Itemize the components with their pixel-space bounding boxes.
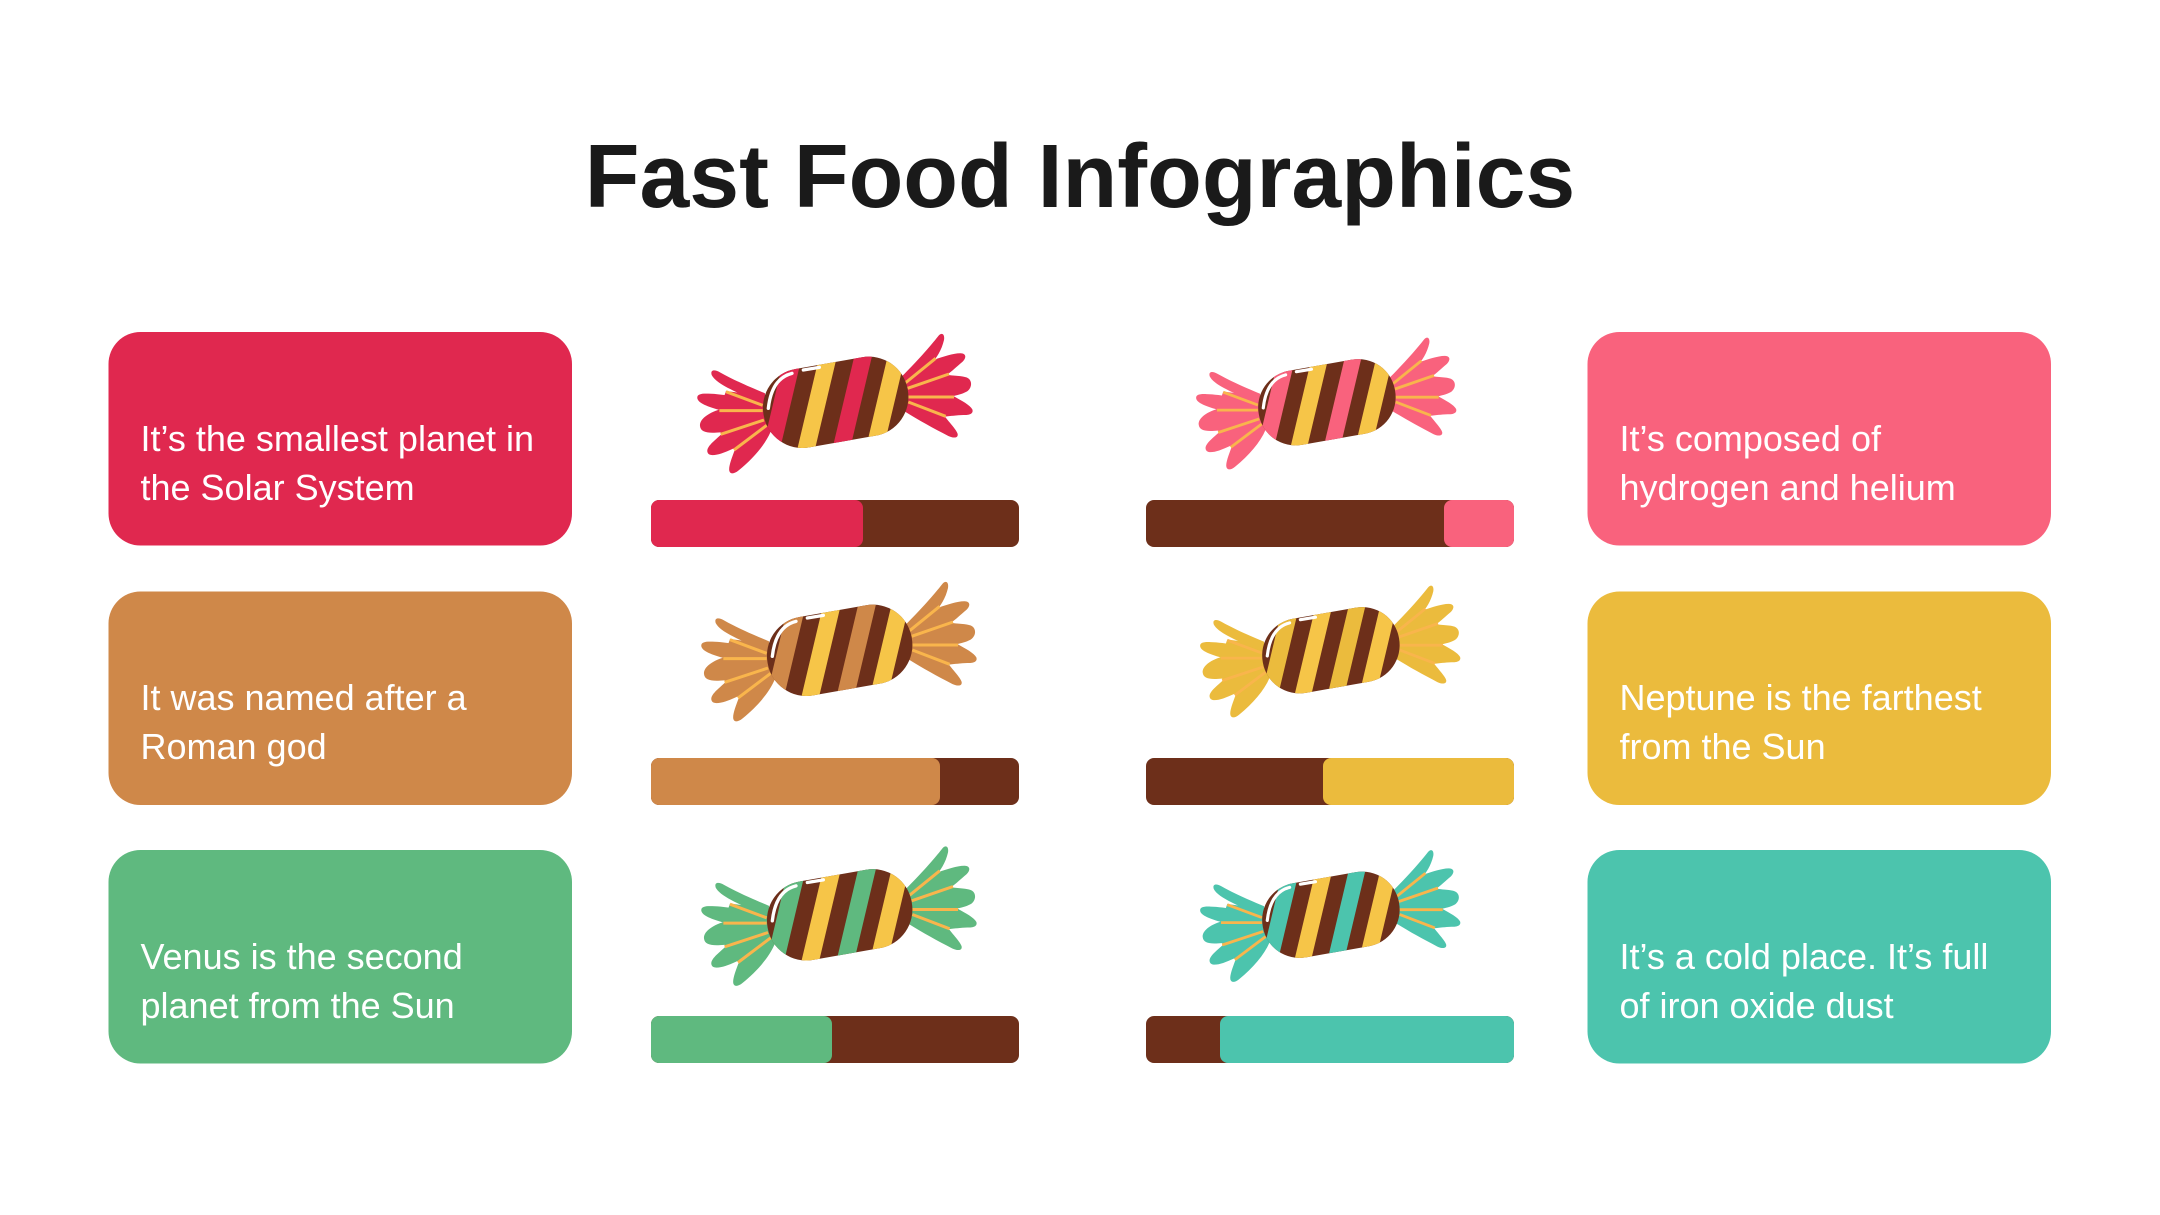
icon: red candy — [697, 334, 973, 473]
bar: teal progress — [1146, 1016, 1514, 1063]
panel: Mercury card: the Solar System — [140, 467, 415, 508]
panel: Mercury card: It’s the smallest planet in — [140, 418, 534, 459]
panel: Jupiter card — [1588, 332, 2051, 546]
panel: Mars card — [108, 592, 572, 805]
panel: Mars card: Roman god — [140, 726, 327, 767]
panel: Mars card: It was named after a — [140, 677, 468, 718]
panel: Neptune card: Neptune is the farthest — [1620, 677, 1982, 718]
panel: Venus card — [108, 850, 572, 1064]
bar: green progress — [651, 1016, 1019, 1063]
panel: Venus card: Venus is the second — [140, 936, 463, 977]
panel: Neptune card — [1588, 592, 2051, 805]
icon: orange candy — [701, 582, 977, 721]
icon: teal candy — [1200, 850, 1460, 982]
panel: Mercury card — [108, 332, 572, 546]
icon: green candy — [701, 846, 977, 986]
bar: red progress — [651, 500, 1019, 547]
bar: pink progress — [1146, 500, 1514, 547]
panel: Mars dust card: of iron oxide dust — [1620, 985, 1894, 1026]
panel: Mars dust card — [1588, 850, 2051, 1064]
icon: pink candy — [1196, 338, 1456, 469]
bar: yellow progress — [1146, 758, 1514, 805]
title: Fast Food Infographics — [585, 126, 1575, 226]
panel: Neptune card: from the Sun — [1620, 726, 1826, 767]
panel: Jupiter card: hydrogen and helium — [1620, 467, 1956, 508]
panel: Mars dust card: It’s a cold place. It’s full — [1620, 936, 1988, 977]
bar: orange progress — [651, 758, 1019, 805]
panel: Venus card: planet from the Sun — [140, 985, 455, 1026]
panel: Jupiter card: It’s composed of — [1620, 418, 1882, 459]
icon: yellow candy — [1200, 586, 1460, 717]
